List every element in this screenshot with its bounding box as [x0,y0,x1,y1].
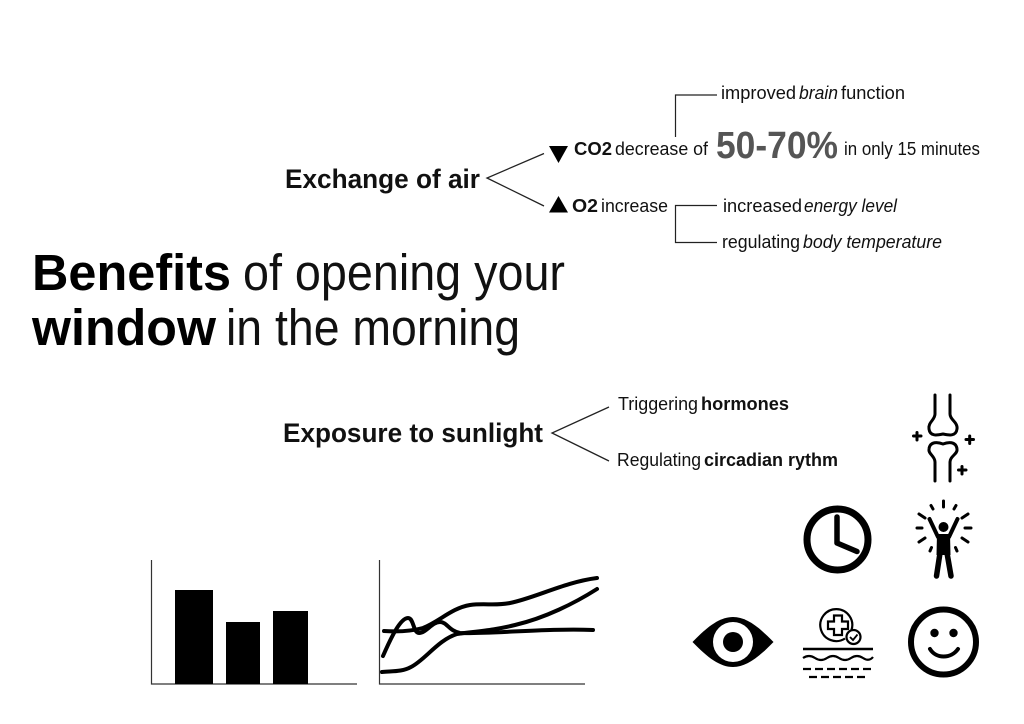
text: increased energy level: energy level [804,196,898,216]
icon: energetic person [917,501,971,576]
CO2 decrease statement: CO2 [574,139,612,159]
text: improved brain function [721,83,905,103]
icon: clock [807,509,868,570]
text: regulating circadian rythm: circadian rythm [704,450,838,470]
text: improved brain function: function [841,83,905,103]
heading: exchange of air: Exchange of air [285,164,480,194]
CO2 decrease statement: in only 15 minutes [844,139,980,159]
text: triggering hormones [618,394,789,414]
title: window [31,299,216,356]
text: regulating body temperature [722,232,942,252]
title: of opening your [243,244,565,301]
CO2 decrease statement: decrease of [615,139,709,159]
O2 increase statement [572,196,668,216]
line chart [380,560,597,684]
O2 increase statement: O2 [572,196,598,216]
connector: brain function [676,95,717,137]
text: triggering hormones: hormones [701,394,789,414]
O2 increase statement: increase [601,196,668,216]
text: improved brain function: improved [721,83,796,103]
CO2 decrease statement [574,125,980,167]
panel: exposure to sunlight [283,394,838,470]
icon: eye [692,617,774,667]
title: Benefits [32,244,231,301]
panel: exchange of air [285,83,980,252]
icon: down triangle [549,146,568,163]
CO2 decrease statement: 50-70% [716,125,838,167]
branch lines: exposure to sunlight [552,407,609,461]
text: regulating circadian rythm [617,450,838,470]
text: regulating circadian rythm: Regulating [617,450,701,470]
title [31,244,565,356]
text: increased energy level [723,196,898,216]
icon: skin care [803,609,873,677]
branch lines: exchange of air [487,154,544,206]
icon: bone joint [914,395,974,481]
text: increased energy level: increased [723,196,802,216]
text: regulating body temperature: body temperature [803,232,942,252]
title: in the morning [226,299,520,356]
icon: smiley [911,610,976,674]
heading: exposure to sunlight: Exposure to sunlight [283,418,543,448]
connector: O2 effects [676,206,717,242]
bar chart [152,560,357,684]
icon: up triangle [549,196,568,212]
text: improved brain function: brain [799,83,838,103]
text: regulating body temperature: regulating [722,232,800,252]
text: triggering hormones: Triggering [618,394,698,414]
